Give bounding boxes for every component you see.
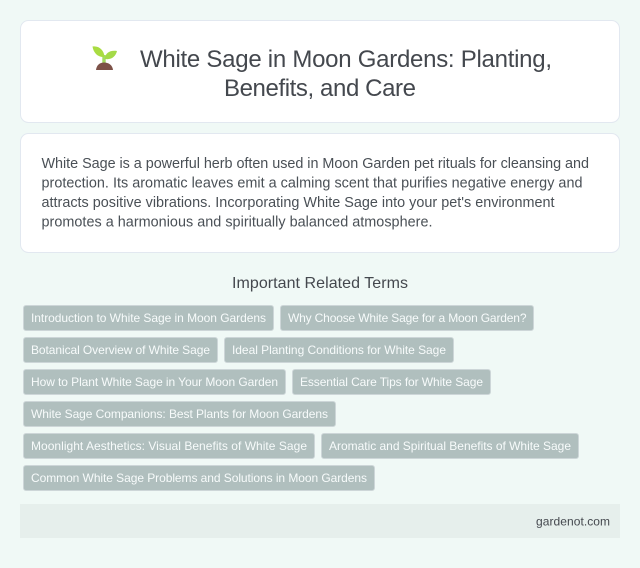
tag: ideal planting [224, 338, 454, 362]
tag: botanical overview: Botanical Overview of White Sage [31, 343, 210, 357]
title: Benefits, and Care [224, 75, 416, 102]
panel: title card [20, 20, 620, 122]
description text: attracts positive vibrations. Incorporating White Sage into your pet's environment [42, 195, 554, 211]
tag: companions: White Sage Companions: Best Plants for Moon Gardens [31, 407, 328, 421]
footer site name: gardenot.com [536, 514, 610, 528]
icon: seedling [92, 46, 117, 70]
description text: promotes a harmonious and spiritually balanced atmosphere. [42, 214, 432, 230]
tag: aromatic and spiritual [322, 434, 578, 458]
tag: moonlight aesthetics [24, 434, 314, 458]
tag: companions [24, 402, 336, 426]
tag: why choose [280, 306, 534, 330]
title [140, 46, 552, 102]
tag: common problems [24, 466, 374, 490]
tag: moonlight aesthetics: Moonlight Aesthetics: Visual Benefits of White Sage [31, 439, 307, 453]
tag list [24, 306, 578, 490]
title: White Sage in Moon Gardens: Planting, [140, 46, 552, 73]
tag: essential care [292, 370, 490, 394]
description text: protection. Its aromatic leaves emit a calming scent that purifies negative energy and [42, 176, 582, 192]
tag: how to plant [24, 370, 286, 394]
tag: introduction [24, 306, 274, 330]
tag: why choose: Why Choose White Sage for a Moon Garden? [288, 311, 527, 325]
tag: common problems: Common White Sage Problems and Solutions in Moon Gardens [31, 471, 367, 485]
tag: how to plant: How to Plant White Sage in Your Moon Garden [31, 375, 278, 389]
heading: important related terms: Important Related Terms [232, 275, 408, 292]
tag: ideal planting: Ideal Planting Conditions for White Sage [232, 343, 446, 357]
description text [42, 156, 589, 230]
panel: description card [20, 134, 620, 252]
tag: introduction: Introduction to White Sage in Moon Gardens [31, 311, 266, 325]
description text: White Sage is a powerful herb often used in Moon Garden pet rituals for cleansing and [42, 156, 589, 172]
footer [20, 504, 620, 538]
tag: essential care: Essential Care Tips for White Sage [300, 375, 483, 389]
tag: botanical overview [24, 338, 218, 362]
tag: aromatic and spiritual: Aromatic and Spiritual Benefits of White Sage [329, 439, 571, 453]
